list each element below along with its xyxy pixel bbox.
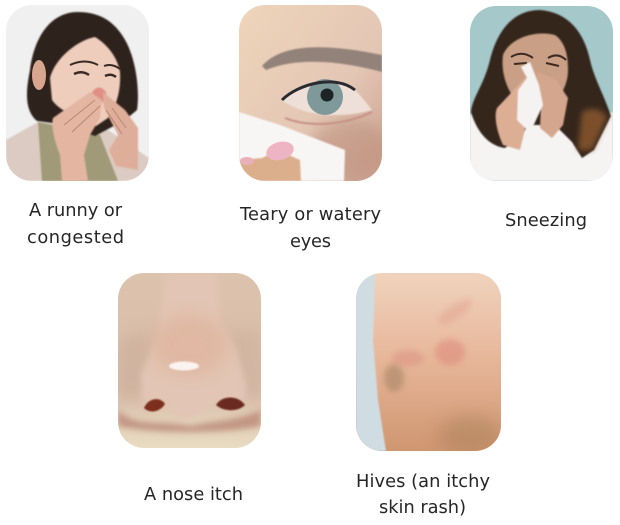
photo: eye with tissue xyxy=(239,5,390,181)
card: runny or congested nose xyxy=(6,5,149,248)
label: Hives (an itchy skin rash): Hives (an itchy xyxy=(356,471,490,492)
label: Sneezing: Sneezing xyxy=(505,210,587,231)
label: Teary or watery eyes xyxy=(239,204,381,252)
label: Hives (an itchy skin rash) xyxy=(356,471,490,518)
label: Teary or watery eyes: eyes xyxy=(290,231,331,252)
card: sneezing xyxy=(470,6,613,231)
photo: close-up of an itchy nose xyxy=(118,273,261,448)
label: Hives (an itchy skin rash): skin rash) xyxy=(379,497,466,518)
card: teary or watery eyes xyxy=(239,5,390,252)
card: hives xyxy=(356,273,502,518)
label: A runny or congested: A runny or xyxy=(29,200,123,221)
label: A nose itch: A nose itch xyxy=(144,484,243,505)
photo: skin with an itchy rash xyxy=(356,273,502,455)
photo: woman holding her nose xyxy=(6,5,149,181)
card: nose itch xyxy=(118,273,261,505)
label: Teary or watery eyes: Teary or watery xyxy=(239,204,381,225)
label: A runny or congested xyxy=(27,200,124,248)
label: A runny or congested: congested xyxy=(27,227,124,248)
photo: woman sneezing into a tissue xyxy=(470,6,613,181)
